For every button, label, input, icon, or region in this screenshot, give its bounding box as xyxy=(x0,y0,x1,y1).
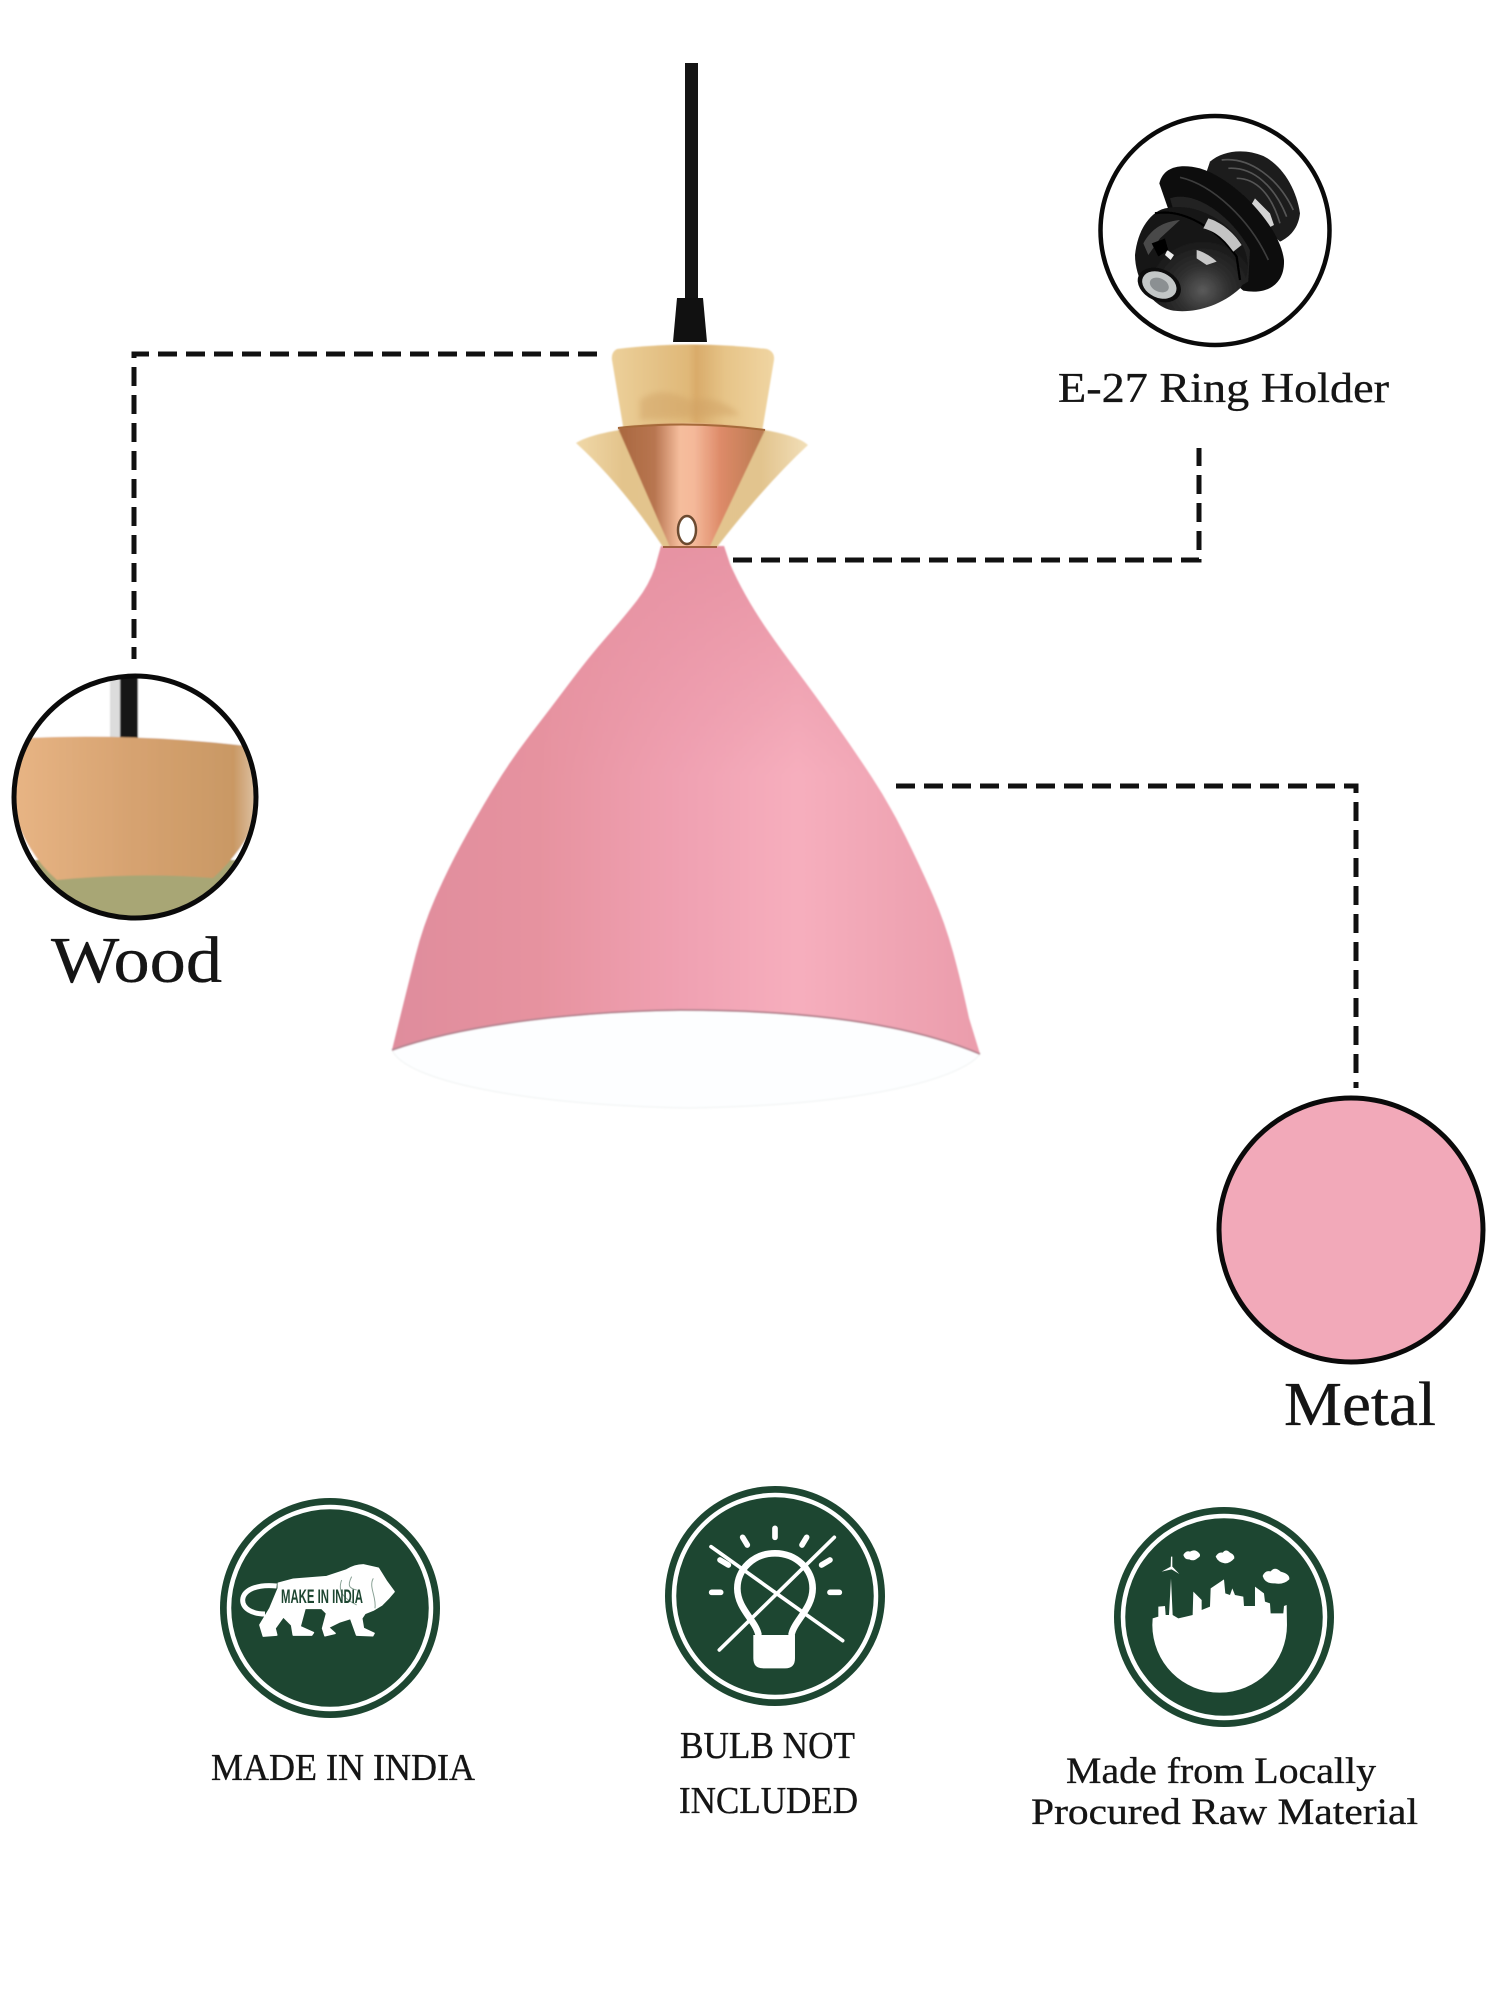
icon: lamp holder xyxy=(1132,151,1300,311)
badge: made in India xyxy=(211,1498,476,1789)
label line 1: BULB NOT xyxy=(680,1725,855,1767)
metal swatch circle xyxy=(1219,1098,1483,1362)
copper cone xyxy=(618,423,765,547)
callout: metal xyxy=(1219,1098,1483,1439)
cone bottom rim xyxy=(663,546,717,548)
dashed connector: wood xyxy=(134,354,597,659)
label line 1: Made from Locally xyxy=(1066,1751,1377,1792)
badge: bulb not included xyxy=(665,1486,885,1822)
lion text: MAKE IN INDIA xyxy=(281,1587,363,1608)
icon: city skyline xyxy=(1152,1550,1289,1693)
icon: lion xyxy=(243,1565,394,1636)
lamp cord xyxy=(685,63,698,303)
wooden cap xyxy=(612,344,774,432)
badge disc xyxy=(220,1498,440,1718)
wood circle outline xyxy=(14,676,256,918)
label line 2: INCLUDED xyxy=(679,1780,858,1822)
dashed connector: metal xyxy=(896,786,1356,1088)
shade inner opening xyxy=(392,1010,980,1108)
callout: wood xyxy=(8,670,260,997)
cone rim xyxy=(618,424,765,430)
dashed connector: holder xyxy=(733,448,1199,560)
badge disc xyxy=(665,1486,885,1706)
wood grain patch xyxy=(640,392,740,420)
metal label: Metal xyxy=(1284,1371,1436,1439)
label line 2: Procured Raw Material xyxy=(1031,1792,1418,1833)
lamp shade xyxy=(392,546,980,1108)
gold flare xyxy=(576,423,808,547)
wood label: Wood xyxy=(51,924,222,997)
holder circle outline xyxy=(1100,116,1330,345)
badge: locally procured xyxy=(1031,1507,1418,1833)
cord crimp xyxy=(673,298,707,342)
wood material swatch xyxy=(16,678,254,916)
holder label: E-27 Ring Holder xyxy=(1058,366,1389,412)
label: MADE IN INDIA xyxy=(211,1747,476,1789)
badge disc xyxy=(1114,1507,1334,1727)
callout: E-27 ring holder xyxy=(1058,116,1389,412)
pendant lamp xyxy=(392,63,980,1108)
cone hole xyxy=(678,516,696,544)
icon: crossed bulb xyxy=(711,1528,843,1668)
